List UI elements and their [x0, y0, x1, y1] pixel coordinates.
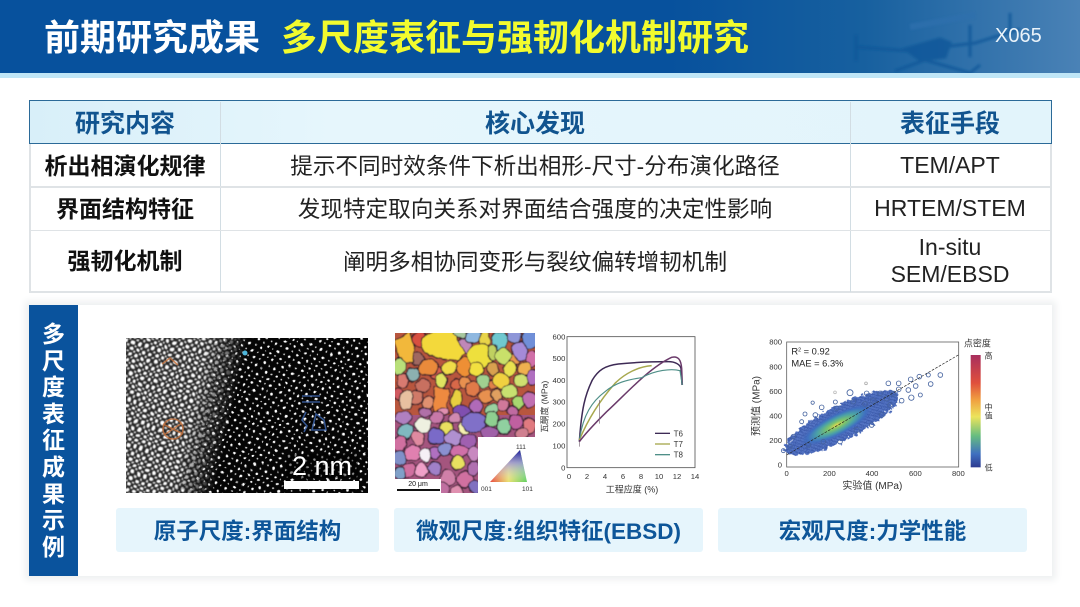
subtitle: 多尺度表征与强韧化机制研究 [281, 17, 749, 58]
row 2 method: HRTEM/STEM [874, 195, 1026, 221]
caption: micro scale [394, 508, 703, 552]
curve T7 [579, 366, 652, 440]
side label: 果 [42, 481, 65, 507]
table: research findings [29, 100, 1052, 293]
side label: 例 [42, 534, 65, 560]
caption: atomic scale [116, 508, 379, 552]
axis labels: 400 [769, 411, 782, 420]
side label: 尺 [42, 348, 65, 374]
inset legend: 101 [522, 486, 533, 493]
side label: 多 [42, 321, 65, 347]
row 3 method: SEM/EBSD [891, 261, 1009, 287]
axis labels: 600 [769, 387, 782, 396]
fit statistics: R [791, 347, 798, 357]
stress-strain chart: 600 [553, 332, 565, 341]
axis labels: 800 [769, 362, 782, 371]
stress-strain chart: 14 [691, 472, 700, 481]
stress-strain chart [540, 332, 700, 494]
row 3 method [891, 234, 1009, 287]
lower grains [393, 412, 536, 497]
axis labels: 200 [823, 469, 836, 478]
stress-strain chart: 300 [553, 398, 565, 407]
scale bar [284, 451, 359, 489]
stress-strain chart: 4 [603, 472, 608, 481]
axis labels [749, 338, 965, 492]
upper grains [393, 329, 540, 416]
chart legend: T8 [674, 451, 684, 460]
caption: macro scale: 宏观尺度:力学性能 [779, 519, 966, 544]
caption: atomic scale: 原子尺度:界面结构 [154, 519, 341, 544]
density colour bar: 低 [985, 463, 993, 473]
scatter chart: predicted vs experimental [749, 338, 993, 492]
material code: X065 [995, 25, 1042, 47]
header banner [0, 0, 1080, 78]
row 3 label: 强韧化机制 [68, 248, 182, 274]
scale bar [395, 479, 441, 493]
row divider 2 [30, 230, 1051, 231]
row divider 1 [30, 186, 1051, 188]
density colour bar: 值 [985, 411, 993, 421]
curve T6 [579, 357, 682, 447]
column divider 2 [850, 102, 851, 292]
stress-strain chart: 500 [553, 354, 565, 363]
stress-strain chart: 0 [567, 472, 571, 481]
stress-strain chart: 0 [561, 463, 565, 472]
stress-strain chart: 10 [655, 472, 663, 481]
chart legend [655, 429, 684, 460]
row 1 finding: 提示不同时效条件下析出相形-尺寸-分布演化路径 [290, 154, 780, 179]
side label: 成 [42, 454, 65, 480]
side label: 征 [42, 427, 65, 453]
EBSD orientation map [395, 333, 535, 493]
side label: 度 [42, 374, 65, 400]
row 3 finding: 阐明多相协同变形与裂纹偏转增韧机制 [343, 250, 727, 274]
atomic-scale TEM image [126, 338, 368, 493]
stress-strain chart: 6 [621, 472, 625, 481]
icon: faint drone [858, 12, 1021, 73]
row 2 finding: 发现特定取向关系对界面结合强度的决定性影响 [298, 197, 772, 222]
stress-strain chart: 200 [553, 420, 565, 429]
stress-strain chart: 工程应度 (%) [606, 483, 658, 494]
chart legend: T7 [674, 440, 684, 449]
header: core findings: 核心发现 [485, 110, 585, 138]
chart legend: T6 [674, 429, 684, 438]
row 3 method: In-situ [919, 234, 981, 260]
fit statistics: MAE = 6.3% [791, 359, 843, 369]
axis labels: 200 [769, 436, 782, 445]
density colour bar: 点密度 [964, 338, 991, 349]
inset legend: 111 [516, 444, 526, 451]
axis labels: 预测值 (MPa) [749, 376, 762, 436]
header: methods: 表征手段 [900, 110, 1000, 138]
main title: 前期研究成果 [44, 17, 260, 58]
side label [29, 305, 78, 576]
stress-strain chart: 2 [585, 472, 589, 481]
scale bar: 20 μm [408, 481, 428, 488]
density colour bar: 中 [985, 402, 993, 412]
fit statistics [791, 347, 843, 369]
side label: 表 [42, 401, 65, 427]
row 1 method: TEM/APT [900, 152, 1000, 178]
axis labels: 0 [778, 460, 782, 469]
stress-strain chart: 8 [639, 472, 643, 481]
axis labels: 0 [785, 469, 789, 478]
row 1 label: 析出相演化规律 [44, 152, 206, 178]
scale bar: 2 nm [292, 451, 352, 481]
density colour bar: 高 [985, 351, 993, 361]
axis labels: 400 [866, 469, 878, 478]
panel: multi-scale results [29, 305, 1052, 576]
axis labels: 800 [952, 469, 965, 478]
side label: 示 [42, 507, 65, 533]
regression line [787, 355, 958, 455]
stress-strain chart: 12 [673, 472, 681, 481]
axis labels: 实验值 (MPa) [842, 479, 902, 492]
axis labels: 800 [769, 338, 782, 347]
axis labels: 600 [909, 469, 922, 478]
fit statistics: = 0.92 [801, 347, 830, 357]
curve T7 late [579, 357, 682, 442]
table header row [29, 100, 1052, 144]
inset legend: 001 [481, 486, 492, 493]
header: research content: 研究内容 [75, 110, 175, 138]
curve T8 [580, 370, 682, 438]
row 2 label: 界面结构特征 [56, 196, 194, 222]
density colour bar [964, 338, 993, 473]
column dividers [220, 102, 221, 292]
point cloud [777, 373, 943, 467]
stress-strain chart: 400 [553, 376, 565, 385]
caption: micro scale: 微观尺度:组织特征(EBSD) [416, 519, 681, 544]
inset legend [478, 437, 535, 493]
fit statistics: 2 [798, 347, 801, 353]
stress-strain chart: 100 [553, 441, 565, 450]
caption: macro scale [718, 508, 1027, 552]
